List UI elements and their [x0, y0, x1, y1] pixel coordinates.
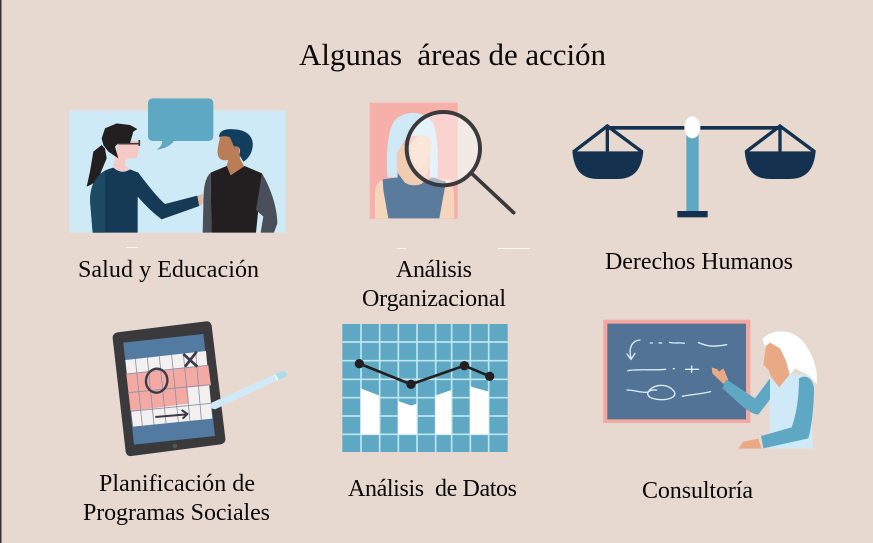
label: Análisis Organizacional: Análisis [396, 257, 472, 283]
icon: magnifying glass over portrait [370, 103, 514, 219]
icon: consultant at chalkboard [603, 320, 817, 449]
label: Derechos Humanos: Derechos Humanos [605, 249, 793, 275]
label: Análisis de Datos: Análisis de Datos [348, 476, 517, 502]
label: Salud y Educación: Salud y Educación [78, 257, 259, 283]
icon: tablet planner [113, 321, 287, 456]
label: Análisis Organizacional [362, 257, 506, 312]
white specks under icon row [126, 247, 530, 249]
label: Planificación de Programas Sociales [83, 471, 270, 526]
label: Análisis Organizacional: Organizacional [362, 286, 506, 312]
icon: balance scale [572, 116, 816, 217]
icon: data chart [342, 324, 508, 452]
label: Planificación de Programas Sociales: Programas Sociales [83, 500, 270, 526]
label: Consultoría: Consultoría [642, 478, 753, 504]
icon: two people talking [69, 98, 286, 233]
label: Planificación de Programas Sociales: Planificación de [99, 471, 255, 497]
title: Algunas áreas de acción [299, 37, 606, 72]
